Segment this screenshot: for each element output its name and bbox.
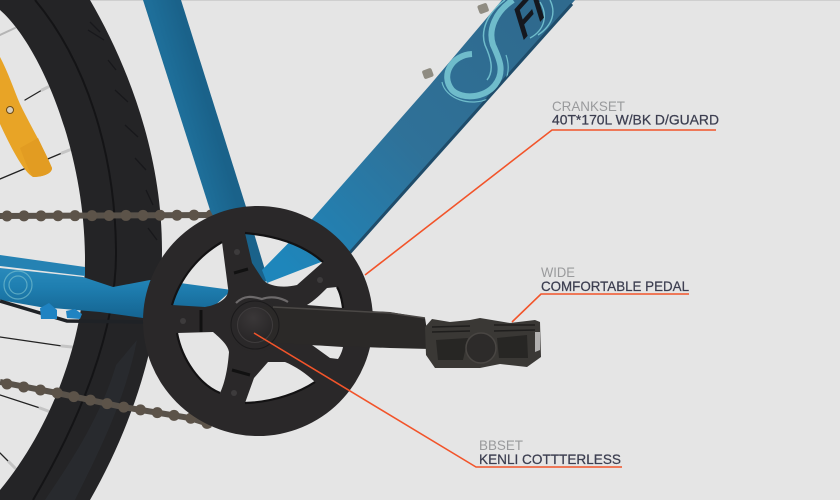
chainring bolts xyxy=(180,249,323,396)
label: crankset: CRANKSET xyxy=(552,98,625,114)
chain stay xyxy=(0,268,232,322)
seat tube xyxy=(143,0,268,290)
leader line: bottom bracket xyxy=(254,333,622,467)
upper chain xyxy=(0,215,218,216)
spec: pedal: COMFORTABLE PEDAL xyxy=(541,278,689,294)
wheel spokes xyxy=(0,28,72,468)
reflector xyxy=(0,57,52,177)
spec: crankset: 40T*170L W/BK D/GUARD xyxy=(552,112,719,128)
chainring guard xyxy=(143,206,373,436)
callout: bottom bracket xyxy=(254,333,622,467)
label: pedal: WIDE xyxy=(541,264,575,280)
callout: crankset xyxy=(365,98,719,275)
down tube xyxy=(262,0,575,283)
spec: bottom bracket: KENLI COTTTERLESS xyxy=(479,451,621,467)
lower chain xyxy=(0,382,212,425)
brake cable clips xyxy=(40,303,82,319)
seat stay xyxy=(0,255,85,276)
crank arm xyxy=(229,297,430,352)
bottle bolts xyxy=(422,3,489,79)
leader line: crankset xyxy=(365,130,716,275)
pedal xyxy=(425,318,541,368)
label: bottom bracket: BBSET xyxy=(479,437,523,453)
frame swirl graphic xyxy=(442,0,553,102)
rear tire xyxy=(0,0,162,500)
leader line: pedal xyxy=(512,294,689,322)
callout: pedal xyxy=(512,264,689,322)
